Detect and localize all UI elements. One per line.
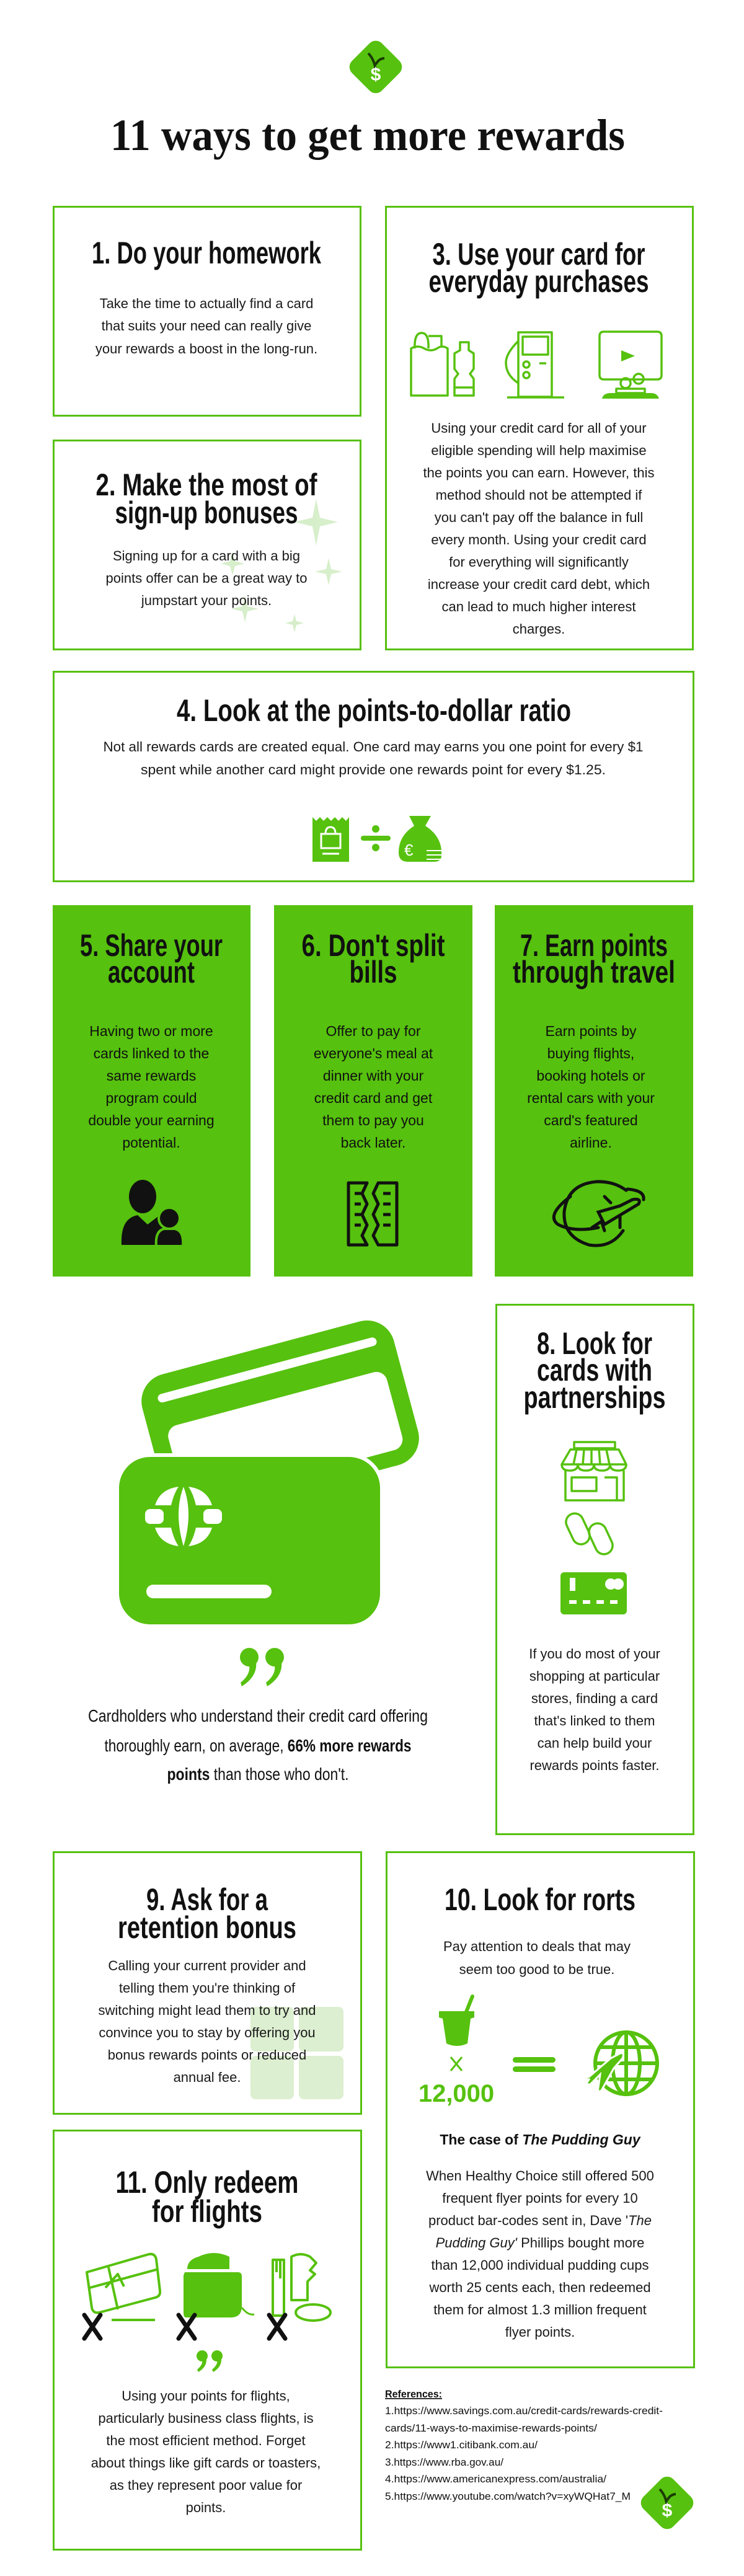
body 7: booking hotels or xyxy=(536,1068,645,1084)
body 1 xyxy=(95,296,317,356)
heading 7 xyxy=(513,928,675,989)
heading 8 xyxy=(523,1326,666,1415)
heading 3: everyday purchases xyxy=(429,264,649,299)
body 11: points. xyxy=(186,2500,226,2515)
logo: top: $ xyxy=(371,64,381,85)
icon: globe with plane xyxy=(554,1182,644,1246)
body 9: convince you to stay by offering you xyxy=(99,2025,316,2040)
body 8: stores, finding a card xyxy=(531,1691,658,1706)
panel: 2 sign-up bonuses xyxy=(53,440,361,650)
body 6: dinner with your xyxy=(323,1068,424,1084)
icon: receipt divided by money bag xyxy=(312,816,441,862)
panel: 11 redeem for flights xyxy=(53,2130,361,2549)
body 9 xyxy=(99,1958,316,2085)
body 5 xyxy=(88,1023,215,1151)
body 4: Not all rewards cards are created equal. One card may earns you one point for every $1 xyxy=(103,739,644,755)
body 10: Pay attention to deals that may xyxy=(443,1939,631,1954)
heading 9: 9. Ask for a xyxy=(146,1882,268,1917)
panel: 7 earn points through travel xyxy=(495,905,693,1277)
body 3: charges. xyxy=(513,621,565,637)
body 8: that's linked to them xyxy=(534,1713,655,1728)
body 10 case: When Healthy Choice still offered 500 xyxy=(426,2168,654,2184)
body 9: Calling your current provider and xyxy=(108,1958,306,1973)
gift decoration xyxy=(250,2007,343,2099)
body 8: shopping at particular xyxy=(529,1668,660,1684)
body 9: telling them you're thinking of xyxy=(119,1980,296,1996)
body 8 xyxy=(529,1646,660,1773)
body 3: Using your credit card for all of your xyxy=(431,420,647,436)
heading 6: bills xyxy=(350,955,397,989)
icon: quote mark xyxy=(240,1648,284,1686)
logo: top xyxy=(346,37,405,97)
icons: gift card, toaster, clothes crossed out xyxy=(84,2253,330,2339)
heading 7: 7. Earn points xyxy=(520,928,668,963)
panel: 5 share your account xyxy=(53,905,250,1277)
body 5: same rewards xyxy=(107,1068,196,1084)
body 4: spent while another card might provide one rewards point for every $1.25. xyxy=(141,762,606,777)
body 6: them to pay you xyxy=(322,1112,424,1128)
panel: 6 don't split bills xyxy=(274,905,472,1277)
body 11: as they represent poor value for xyxy=(110,2477,302,2493)
heading 11: for flights xyxy=(152,2194,262,2229)
body 3: every month. Using your credit card xyxy=(431,532,647,547)
panel: 10 rorts xyxy=(387,1852,694,2367)
body 7: Earn points by xyxy=(545,1023,637,1039)
body 3: for everything will significantly xyxy=(449,554,629,570)
icon: split receipt xyxy=(348,1183,397,1245)
heading 8: 8. Look for xyxy=(537,1326,652,1361)
body 10: seem too good to be true. xyxy=(459,1962,614,1977)
body 7 xyxy=(527,1023,655,1151)
heading 3: 3. Use your card for xyxy=(433,237,645,272)
body 5: double your earning xyxy=(88,1112,215,1128)
body 7: rental cars with your xyxy=(527,1090,655,1106)
body 7: airline. xyxy=(570,1135,612,1151)
body 3 xyxy=(423,420,655,637)
body 4 xyxy=(103,739,644,777)
icon: pudding x 12,000 = flight xyxy=(418,1996,657,2107)
body 8: If you do most of your xyxy=(529,1646,660,1662)
body 8: rewards points faster. xyxy=(529,1758,660,1773)
body 2 xyxy=(106,548,307,608)
heading 4: 4. Look at the points-to-dollar ratio xyxy=(177,693,571,728)
body 10 case: flyer points. xyxy=(505,2324,575,2340)
logo: bottom: $ xyxy=(662,2500,673,2521)
heading 2: sign-up bonuses xyxy=(115,495,298,530)
body 9: annual fee. xyxy=(174,2069,241,2085)
body 10 case: worth 25 cents each, then redeemed xyxy=(428,2280,651,2295)
body 5: Having two or more xyxy=(89,1023,213,1039)
icon: big credit cards xyxy=(119,1314,425,1624)
callout: 66% more rewards: Cardholders who understand their credit card offering xyxy=(88,1706,428,1725)
heading 9: retention bonus xyxy=(118,1910,296,1945)
heading 7: through travel xyxy=(513,955,675,989)
body 5: potential. xyxy=(122,1135,180,1151)
heading 2: 2. Make the most of xyxy=(95,467,317,502)
body 11 xyxy=(91,2388,321,2515)
body 6: Offer to pay for xyxy=(326,1023,421,1039)
heading 9 xyxy=(118,1882,296,1945)
body 3: the points you can earn. However, this xyxy=(423,465,655,480)
body 1: Take the time to actually find a card xyxy=(100,296,313,311)
body 3: eligible spending will help maximise xyxy=(431,443,647,458)
body 10 xyxy=(443,1939,631,1977)
body 1: your rewards a boost in the long-run. xyxy=(95,341,317,356)
heading 5: account xyxy=(108,955,195,989)
body 6: everyone's meal at xyxy=(314,1045,433,1061)
references: 5.https://www.youtube.com/watch?v=xyWQHat7_M xyxy=(385,2490,631,2502)
body 10 case: than 12,000 individual pudding cups xyxy=(431,2257,649,2273)
heading 2 xyxy=(95,467,317,530)
body 10 case: Pudding Guy' Phillips bought more xyxy=(436,2235,644,2251)
body 7: card's featured xyxy=(544,1112,638,1128)
body 3: you can't pay off the balance in full xyxy=(435,510,643,525)
body 5: cards linked to the xyxy=(94,1045,209,1061)
body 6: back later. xyxy=(341,1135,405,1151)
body 9: switching might lead them to try and xyxy=(99,2003,316,2018)
body 5: program could xyxy=(105,1090,197,1106)
body 11: about things like gift cards or toasters, xyxy=(91,2455,321,2471)
references: 3.https://www.rba.gov.au/ xyxy=(385,2456,503,2468)
icon: pudding x 12,000 = flight: 12,000 xyxy=(418,2080,494,2107)
body 6: credit card and get xyxy=(314,1090,433,1106)
references: cards/11-ways-to-maximise-rewards-points/ xyxy=(385,2422,597,2434)
body 3: increase your credit card debt, which xyxy=(428,577,650,592)
heading 10: 10. Look for rorts xyxy=(445,1882,636,1917)
icon: two people xyxy=(122,1180,183,1246)
body 2: jumpstart your points. xyxy=(141,593,272,608)
body 6 xyxy=(314,1023,433,1151)
references: 1.https://www.savings.com.au/credit-cards/rewards-credit- xyxy=(385,2405,663,2417)
icons: store, chain, card xyxy=(562,1442,626,1557)
panel: 8 partnerships xyxy=(496,1304,693,1834)
body 3: can lead to much higher interest xyxy=(441,599,636,614)
icon: quote mark xyxy=(197,2350,223,2372)
heading 1: 1. Do your homework xyxy=(92,236,321,270)
heading 6 xyxy=(301,928,445,989)
heading 6: 6. Don't split xyxy=(301,928,445,963)
callout: 66% more rewards: thoroughly earn, on average, 66% more rewards xyxy=(104,1736,412,1755)
sparkles decoration xyxy=(221,499,342,632)
heading 8: partnerships xyxy=(523,1380,666,1415)
body 7: buying flights, xyxy=(547,1045,634,1061)
body 10 case xyxy=(426,2168,654,2340)
icon: receipt divided by money bag: € xyxy=(404,841,414,859)
references xyxy=(385,2388,663,2502)
body 3: method should not be attempted if xyxy=(436,487,642,503)
callout: 66% more rewards: points than those who don't. xyxy=(167,1764,348,1784)
body 11: the most efficient method. Forget xyxy=(106,2433,306,2448)
panel: 4 points-to-dollar ratio xyxy=(53,672,693,882)
body 1: that suits your need can really give xyxy=(102,318,311,334)
heading 5 xyxy=(80,928,223,989)
logo: bottom xyxy=(637,2473,697,2533)
panel: 3 everyday purchases xyxy=(386,207,693,650)
heading 3 xyxy=(429,237,649,299)
body 2: points offer can be a great way to xyxy=(106,570,307,586)
body 2: Signing up for a card with a big xyxy=(113,548,300,564)
references: References: xyxy=(385,2388,442,2400)
body 9: bonus rewards points or reduced xyxy=(108,2047,306,2063)
heading 11 xyxy=(115,2165,299,2229)
body 11: Using your points for flights, xyxy=(122,2388,290,2404)
references: 4.https://www.americanexpress.com/australia/ xyxy=(385,2473,606,2485)
body 8: can help build your xyxy=(538,1735,652,1751)
title: 11 ways to get more rewards xyxy=(110,110,625,160)
heading 8: cards with xyxy=(537,1353,652,1388)
icons: shopping, fuel, tv xyxy=(411,332,662,397)
callout: 66% more rewards xyxy=(88,1706,428,1784)
panel: 1 do your homework xyxy=(53,207,361,415)
heading 11: 11. Only redeem xyxy=(115,2165,299,2200)
panel: 9 retention bonus xyxy=(53,1852,361,2114)
body 10 case: product bar-codes sent in, Dave 'The xyxy=(428,2213,652,2228)
body 10 case: frequent flyer points for every 10 xyxy=(442,2190,638,2206)
body 11: particularly business class flights, is xyxy=(98,2410,314,2426)
subheading: the case of the pudding guy: The case of The Pudding Guy xyxy=(440,2131,641,2148)
heading 5: 5. Share your xyxy=(80,928,223,963)
references: 2.https://www1.citibank.com.au/ xyxy=(385,2439,538,2451)
body 10 case: them for almost 1.3 million frequent xyxy=(433,2302,647,2317)
